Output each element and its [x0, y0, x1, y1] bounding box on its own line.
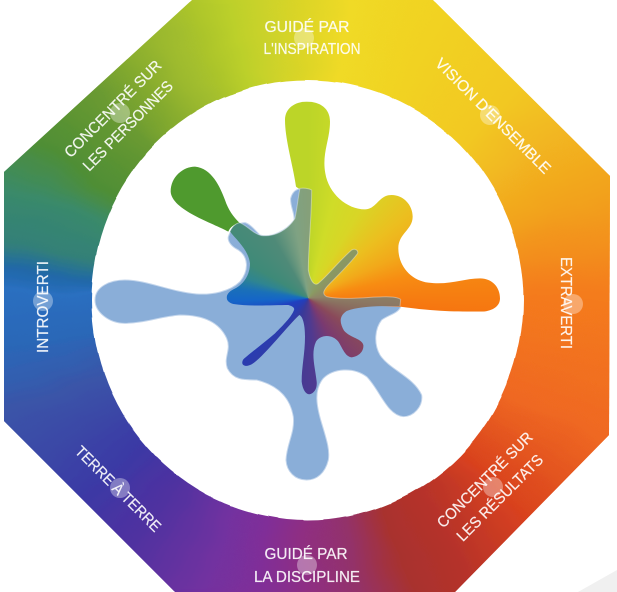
splash: yellow to orange lobes — [285, 102, 500, 312]
splash: overlapping dark centre — [226, 188, 400, 394]
label: guidé par la discipline — [254, 546, 360, 586]
inner white circle — [92, 80, 524, 520]
label: concentré sur les personnes: CONCENTRÉ SUR — [61, 57, 165, 161]
label: introverti: INTROVERTI — [35, 261, 52, 353]
label: guidé par la discipline: GUIDÉ PAR — [264, 546, 348, 563]
splash: pale outline of dark centre — [230, 188, 401, 306]
splash: blue silhouette — [95, 188, 422, 480]
label: concentré sur les résultats: CONCENTRÉ SUR — [434, 429, 537, 532]
label: vision d'ensemble: VISION D'ENSEMBLE — [431, 55, 554, 178]
label: guidé par la discipline: LA DISCIPLINE — [254, 569, 360, 586]
label: guidé par l'inspiration: GUIDÉ PAR — [264, 19, 350, 36]
label: terre à terre: TERRE À TERRE — [71, 443, 164, 536]
label: guidé par l'inspiration: L'INSPIRATION — [264, 41, 360, 58]
central splash — [94, 102, 500, 480]
label: concentré sur les résultats: LES RÉSULTATS — [454, 452, 547, 545]
label: extraverti: EXTRAVERTI — [557, 257, 574, 349]
label: concentré sur les personnes: LES PERSONNES — [80, 78, 177, 175]
splash: green lobe — [171, 167, 239, 232]
label: guidé par l'inspiration — [264, 19, 360, 58]
corner shadow — [578, 570, 617, 592]
